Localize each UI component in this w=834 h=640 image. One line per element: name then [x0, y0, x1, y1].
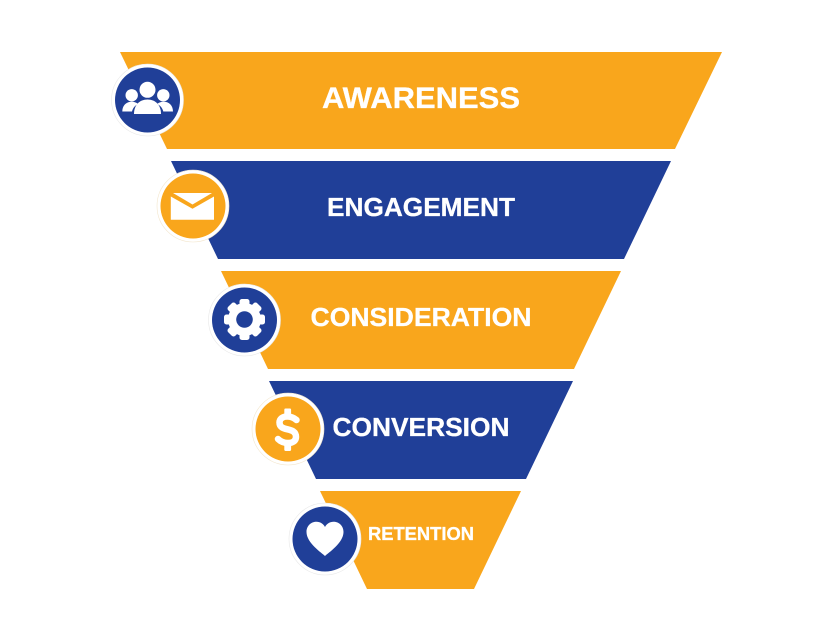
icon: gear — [208, 284, 280, 356]
funnel band: retention: RETENTION — [368, 524, 474, 544]
icon: dollar sign — [252, 393, 324, 465]
funnel band: conversion — [269, 381, 573, 479]
icon: heart — [289, 503, 361, 575]
funnel band: consideration — [221, 271, 621, 369]
funnel band: awareness — [120, 52, 722, 149]
funnel band: retention — [320, 491, 521, 589]
funnel band: conversion: CONVERSION — [332, 412, 510, 442]
funnel band: awareness: AWARENESS — [322, 82, 520, 115]
icon: people group — [112, 64, 184, 136]
funnel band: engagement: ENGAGEMENT — [327, 192, 515, 222]
funnel band: engagement — [171, 161, 671, 259]
funnel band: consideration: CONSIDERATION — [310, 302, 532, 332]
icon: envelope — [157, 170, 229, 242]
